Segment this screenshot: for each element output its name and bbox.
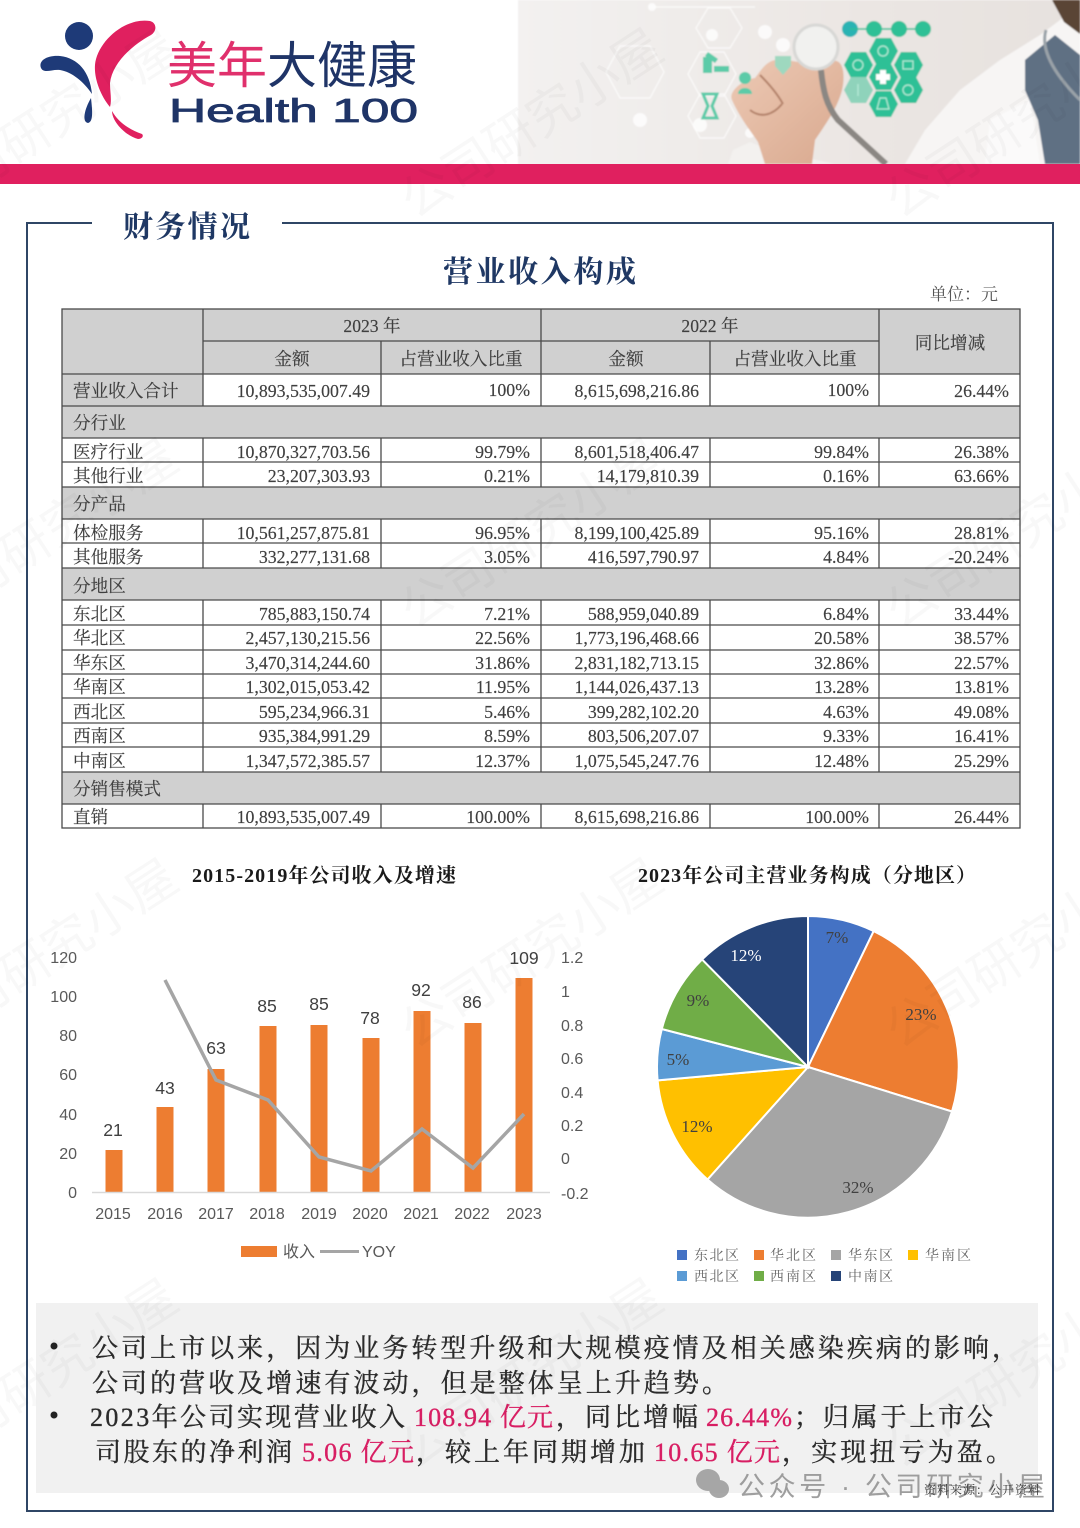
revenue bars	[106, 978, 532, 1192]
bullet 1 text: 公司上市以来，因为业务转型升级和大规模疫情及相关感染疾病的影响，	[92, 1334, 1018, 1363]
summary panel	[36, 1303, 1038, 1493]
section label: by region: 分地区	[73, 576, 126, 596]
pie value labels: 23%	[905, 1005, 937, 1024]
background watermarks: 公司研究小屋	[390, 19, 673, 229]
rows: by region: 2,457,130,215.56	[246, 628, 370, 648]
table header labels: 金额	[608, 349, 644, 369]
rows: by region: 中南区	[73, 751, 126, 771]
rows: by region: 785,883,150.74	[259, 604, 370, 624]
rows: by industry: 8,601,518,406.47	[575, 442, 699, 462]
rows: by region	[73, 604, 1009, 771]
row: direct sales: 100.00%	[805, 807, 869, 827]
background watermarks: 公司研究小屋	[390, 1269, 673, 1479]
background watermarks: 公司研究小屋	[390, 429, 673, 639]
category labels: 2022	[454, 1206, 490, 1223]
pie value labels: 5%	[667, 1050, 689, 1069]
row: direct sales: 26.44%	[954, 807, 1009, 827]
table header labels: 2022 年	[681, 316, 739, 336]
rows: by region: 25.29%	[954, 751, 1009, 771]
YOY line	[165, 980, 524, 1171]
table header labels: 金额	[274, 349, 310, 369]
rows: by region: 1,144,026,437.13	[575, 677, 699, 697]
category labels: 2023	[506, 1206, 542, 1223]
rows: by region: 32.86%	[814, 653, 869, 673]
rows: by product: 96.95%	[475, 523, 530, 543]
row: direct sales: 100.00%	[466, 807, 530, 827]
table header labels: 占营业收入比重	[399, 349, 523, 369]
left axis labels: 0	[68, 1185, 77, 1202]
bar and line chart: revenue and YOY	[50, 948, 589, 1261]
rows: by region: 1,347,572,385.57	[246, 751, 370, 771]
rows: by region: 7.21%	[484, 604, 530, 624]
bullet 2 text: ，同比增幅	[556, 1403, 698, 1432]
rows: by region: 12.37%	[475, 751, 530, 771]
bullet 2 text: ；归属于上市公	[794, 1403, 993, 1432]
rows: by product: 28.81%	[954, 523, 1009, 543]
bullet 2 text	[50, 1403, 1012, 1467]
rows: by region: 9.33%	[823, 726, 869, 746]
hand	[731, 60, 844, 164]
rows: by region: 华南区	[73, 677, 126, 697]
right axis labels	[561, 950, 589, 1203]
logo: Health 100	[40, 21, 418, 139]
rows: by region: 588,959,040.89	[588, 604, 699, 624]
pie legend: 中南区	[848, 1268, 893, 1285]
bar value labels: 63	[206, 1038, 226, 1058]
rows: by region: 935,384,991.29	[259, 726, 370, 746]
pie slices	[657, 916, 959, 1218]
right axis labels: 0	[561, 1151, 570, 1168]
bar value labels: 43	[155, 1078, 175, 1098]
category labels: 2019	[301, 1206, 337, 1223]
left axis labels: 120	[50, 950, 77, 967]
category labels: 2017	[198, 1206, 234, 1223]
row: total	[73, 380, 1009, 401]
pie legend: 西南区	[770, 1268, 816, 1285]
table header labels	[274, 316, 985, 369]
rows: by region: 16.41%	[954, 726, 1009, 746]
table grid	[62, 309, 1020, 828]
rows: by region: 22.56%	[475, 628, 530, 648]
bar value labels: 78	[360, 1008, 380, 1028]
right axis labels: 0.4	[561, 1085, 583, 1102]
bullet 2 text: 司股东的净利润	[95, 1438, 292, 1467]
rows: by product: 8,199,100,425.89	[575, 523, 699, 543]
bar value labels: 109	[509, 948, 539, 968]
bar value labels: 86	[462, 992, 482, 1012]
rows: by industry: 99.84%	[814, 442, 869, 462]
section label: by industry: 分行业	[73, 413, 126, 433]
section heading: 财务情况	[123, 211, 250, 244]
rows: by region: 1,773,196,468.66	[575, 628, 699, 648]
rows: by region: 西南区	[73, 726, 126, 746]
row: total: 8,615,698,216.86	[575, 381, 699, 401]
pie legend: 华北区	[770, 1247, 816, 1264]
rows: by region: 1,075,545,247.76	[575, 751, 699, 771]
rows: by industry: 0.16%	[823, 466, 869, 486]
category labels: 2016	[147, 1206, 183, 1223]
left axis labels: 20	[59, 1146, 77, 1163]
chart legend	[241, 1243, 396, 1261]
rows: by region: 8.59%	[484, 726, 530, 746]
row: direct sales: 10,893,535,007.49	[237, 807, 370, 827]
rows: by product: 416,597,790.97	[588, 547, 699, 567]
table header labels: 2023 年	[343, 316, 401, 336]
right axis labels: 0.6	[561, 1051, 583, 1068]
bullet 2 text: ，实现扭亏为盈。	[782, 1438, 1012, 1467]
rows: by industry: 63.66%	[954, 466, 1009, 486]
pie value labels: 12%	[681, 1117, 713, 1136]
logo Chinese wordmark: 美年	[167, 26, 267, 98]
pink header band	[0, 164, 1080, 184]
table title: 营业收入构成	[443, 256, 636, 289]
rows: by region: 5.46%	[484, 702, 530, 722]
rows: by region: 1,302,015,053.42	[246, 677, 370, 697]
bar value labels: 85	[309, 994, 329, 1014]
bullet 2 text: ，较上年同期增加	[416, 1438, 645, 1467]
rows: by region: 803,506,207.07	[588, 726, 699, 746]
category labels	[95, 1206, 542, 1223]
pie chart title: 2023年公司主营业务构成（分地区）	[638, 863, 976, 887]
logo Chinese wordmark navy: 大健康	[267, 26, 417, 98]
background watermarks: 公司研究小屋	[390, 849, 673, 1059]
WeChat icon	[696, 1469, 729, 1498]
table header labels: 占营业收入比重	[733, 349, 857, 369]
left axis labels: 60	[59, 1067, 77, 1084]
category labels: 2018	[249, 1206, 285, 1223]
green hexagons	[703, 21, 931, 118]
pie value labels: 9%	[687, 991, 709, 1010]
rows: by industry: 99.79%	[475, 442, 530, 462]
rows: by region: 22.57%	[954, 653, 1009, 673]
rows: by region: 49.08%	[954, 702, 1009, 722]
logo mark	[40, 21, 155, 139]
logo English wordmark: Health 100	[169, 92, 418, 129]
rows: by product: -20.24%	[948, 547, 1009, 567]
rows: by region: 13.81%	[954, 677, 1009, 697]
left axis labels: 40	[59, 1107, 77, 1124]
category labels: 2021	[403, 1206, 439, 1223]
chart legend: 收入	[283, 1243, 315, 1261]
rows: by product: 3.05%	[484, 547, 530, 567]
left axis labels: 100	[50, 989, 77, 1006]
pie legend	[677, 1247, 971, 1285]
doctor coat	[905, 0, 1080, 164]
pie legend: 西北区	[694, 1269, 739, 1285]
revenue table	[62, 309, 1020, 828]
bar chart title: 2015-2019年公司收入及增速	[192, 863, 457, 887]
pie legend: 华南区	[925, 1247, 971, 1264]
row: total: 10,893,535,007.49	[237, 381, 370, 401]
rows: by region: 595,234,966.31	[259, 702, 370, 722]
rows: by region: 11.95%	[476, 677, 530, 697]
row: total: 100%	[489, 380, 530, 400]
rows: by industry: 0.21%	[484, 466, 530, 486]
bullet 2 text: 10.65 亿元	[654, 1438, 780, 1467]
rows: by product: 10,561,257,875.81	[237, 523, 370, 543]
rows: by region: 6.84%	[823, 604, 869, 624]
pie chart: revenue by region	[657, 916, 971, 1285]
bullet 2 text: 2023年公司实现营业收入	[90, 1403, 405, 1432]
table shading	[62, 309, 1020, 804]
section label: by product: 分产品	[73, 494, 126, 514]
rows: by region: 西北区	[73, 702, 126, 722]
table header labels: 同比增减	[915, 333, 985, 353]
pie value labels: 12%	[730, 946, 762, 965]
section label: by sales model: 分销售模式	[73, 779, 161, 799]
rows: by region: 38.57%	[954, 628, 1009, 648]
bullet 1 text	[50, 1334, 1018, 1398]
left axis labels	[50, 950, 77, 1202]
right axis labels: -0.2	[561, 1186, 589, 1203]
bar value labels: 85	[257, 996, 277, 1016]
rows: by region: 4.63%	[823, 702, 869, 722]
rows: by region: 东北区	[73, 604, 126, 624]
rows: by product: 4.84%	[823, 547, 869, 567]
rows: by industry: 10,870,327,703.56	[237, 442, 370, 462]
category labels: 2020	[352, 1206, 388, 1223]
row: direct sales: 8,615,698,216.86	[575, 807, 699, 827]
pie value labels: 7%	[826, 928, 848, 947]
header photo: doctor with stethoscope and medical icons	[518, 0, 1080, 165]
rows: by region: 12.48%	[814, 751, 869, 771]
rows: by industry	[73, 442, 1009, 486]
source note: 资料来源：公开资料	[924, 1482, 1040, 1497]
rows: by product: 体检服务	[73, 523, 143, 543]
rows: by region: 2,831,182,713.15	[575, 653, 699, 673]
pie value labels: 32%	[842, 1178, 874, 1197]
bar value labels	[103, 948, 539, 1140]
right axis labels: 0.8	[561, 1018, 583, 1035]
chart legend: YOY	[362, 1244, 396, 1261]
rows: by region: 13.28%	[814, 677, 869, 697]
row: total: 营业收入合计	[73, 381, 179, 401]
WeChat account watermark: 公众号 · 公司研究小屋	[738, 1472, 1045, 1502]
stethoscope tube	[821, 70, 886, 164]
bar value labels: 21	[103, 1120, 123, 1140]
bullet 2 text: 26.44%	[706, 1403, 792, 1432]
rows: by product: 95.16%	[814, 523, 869, 543]
bullet 2 text: 108.94 亿元	[414, 1403, 553, 1432]
row: total: 26.44%	[954, 381, 1009, 401]
right axis labels: 1	[561, 984, 570, 1001]
right axis labels: 0.2	[561, 1118, 583, 1135]
rows: by product: 332,277,131.68	[259, 547, 370, 567]
rows: by region: 华北区	[73, 628, 126, 648]
bullet 2 text: 5.06 亿元	[302, 1438, 414, 1467]
row: direct sales: 直销	[73, 807, 108, 827]
rows: by industry: 其他行业	[73, 466, 144, 486]
rows: by industry: 23,207,303.93	[268, 466, 370, 486]
category labels: 2015	[95, 1206, 131, 1223]
pie value labels	[667, 928, 937, 1197]
rows: by industry: 医疗行业	[73, 442, 144, 462]
unit note: 单位：元	[930, 285, 998, 304]
rows: by product: 其他服务	[73, 547, 143, 567]
rows: by industry: 14,179,810.39	[597, 466, 699, 486]
rows: by region: 33.44%	[954, 604, 1009, 624]
rows: by product	[73, 523, 1009, 567]
bar value labels: 92	[411, 980, 431, 1000]
bullet 1 text: 公司的营收及增速有波动，但是整体呈上升趋势。	[92, 1369, 728, 1398]
rows: by region: 399,282,102.20	[588, 702, 699, 722]
rows: by industry: 26.38%	[954, 442, 1009, 462]
rows: by region: 3,470,314,244.60	[246, 653, 370, 673]
right axis labels: 1.2	[561, 950, 583, 967]
row: direct sales	[73, 807, 1009, 827]
row: total: 100%	[828, 380, 869, 400]
rows: by region: 华东区	[73, 653, 126, 673]
left axis labels: 80	[59, 1028, 77, 1045]
pie legend: 东北区	[694, 1248, 739, 1264]
pie legend: 华东区	[848, 1247, 893, 1264]
rows: by region: 20.58%	[814, 628, 869, 648]
rows: by region: 31.86%	[475, 653, 530, 673]
